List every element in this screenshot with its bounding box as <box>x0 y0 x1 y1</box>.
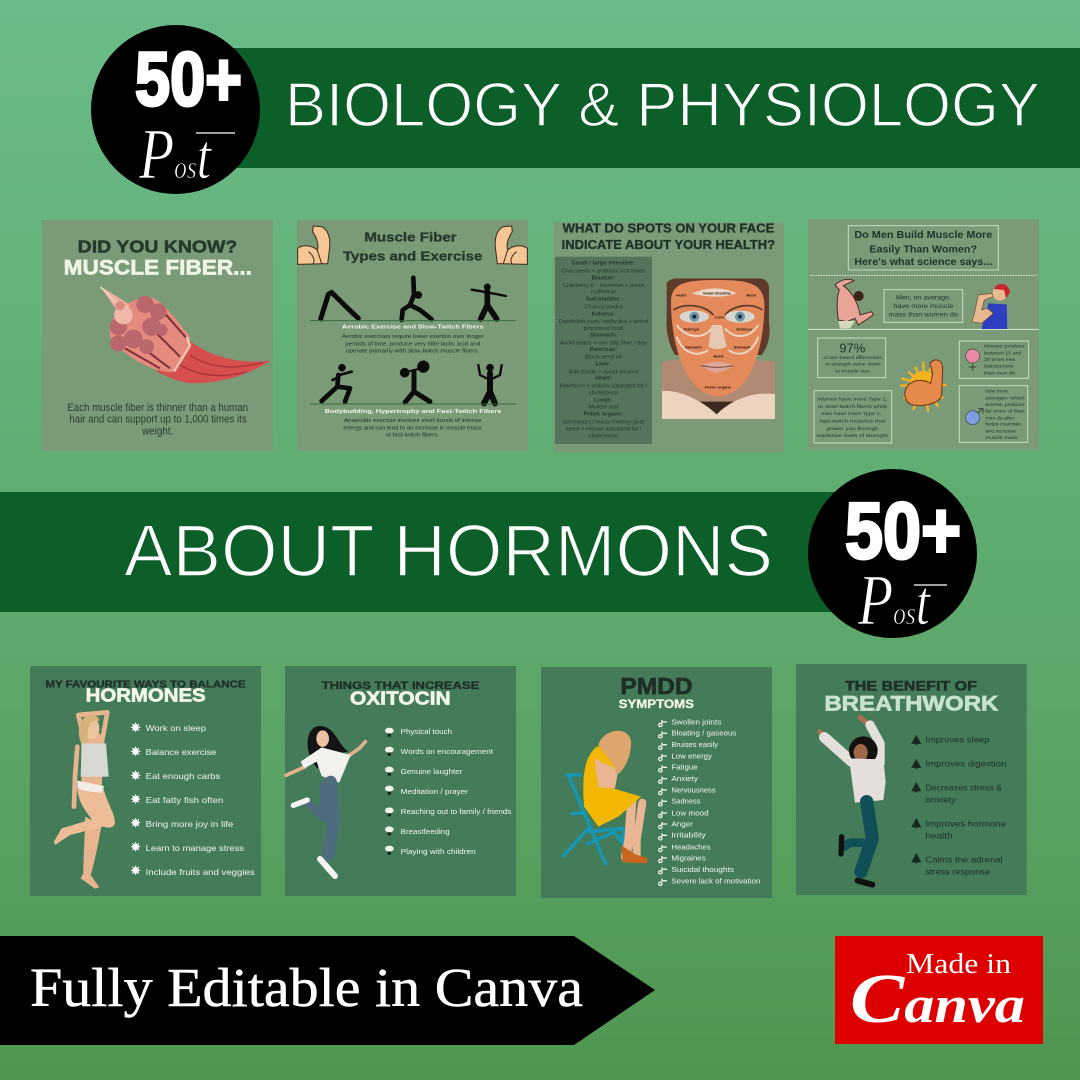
list: symptoms: Nervousness <box>671 787 716 794</box>
list: oxitocin boosters <box>401 727 512 856</box>
callout: testosterone <box>959 341 1029 378</box>
heading: THINGS THAT INCREASE <box>322 680 479 692</box>
list: oxitocin boosters: Meditation / prayer <box>401 787 469 796</box>
body text: Each muscle fiber is thinner than a human <box>67 402 248 414</box>
callout: fiber types: power you through <box>827 426 879 432</box>
remedies list: Stomach: <box>590 333 617 339</box>
heading box <box>848 226 998 270</box>
icons: symptom bullets <box>659 720 667 885</box>
call to action arrow: Fully Editable in Canva <box>30 957 583 1018</box>
banner title: BIOLOGY & PHYSIOLOGY <box>285 71 1040 140</box>
list: symptoms: Low energy <box>671 753 713 760</box>
list: balance tips: Eat fatty fish often <box>146 795 224 805</box>
list: symptoms: Anger <box>671 821 694 828</box>
heading: BREATHWORK <box>824 692 999 716</box>
icons: tree bullets <box>911 735 921 863</box>
remedies list: Pancreas: <box>590 347 617 353</box>
panel: muscle fiber types and exercise <box>297 220 528 451</box>
list: balance tips: Balance exercise <box>146 747 217 757</box>
banner band <box>0 492 840 612</box>
stat: 97 percent: 97% <box>839 341 865 355</box>
list: breathwork benefits <box>925 735 1007 877</box>
callout: fiber types <box>814 391 892 443</box>
anaerobic silhouettes <box>322 361 502 403</box>
badge: 50+ post: Post <box>857 560 932 640</box>
face map illustration: Small intestine <box>703 291 732 296</box>
body text: weight. <box>141 426 173 438</box>
panel: do men build muscle more easily <box>808 219 1039 450</box>
callout: men muscle mass <box>884 290 963 322</box>
heading <box>619 673 694 711</box>
woman figure <box>54 712 115 889</box>
badge: made in canva: Canva <box>850 961 1025 1038</box>
list: symptoms: Bruises easily <box>671 742 719 749</box>
callout: fiber types: fast-twitch muscles that <box>820 419 886 425</box>
list: oxitocin boosters: Words on encouragement <box>401 747 493 756</box>
list: symptoms: Sadness <box>671 799 701 806</box>
list: balance tips: Include fruits and veggies <box>146 867 255 877</box>
heading: SYMPTOMS <box>619 698 694 711</box>
remedies list: processed food <box>584 326 623 332</box>
list: breathwork benefits: stress response <box>925 867 990 877</box>
face map illustration: Stomach <box>685 345 702 350</box>
aerobic text: periods of time, produce very little lactic acid and <box>345 341 480 347</box>
stat: 97 percent: in strength come down <box>825 362 881 367</box>
banner title: ABOUT HORMONS <box>124 511 773 592</box>
callout: fiber types: Women have more Type 1, <box>817 397 887 403</box>
banner band <box>225 48 1080 168</box>
list: breathwork benefits: Calms the adrenal <box>925 855 1003 865</box>
list: oxitocin boosters: Reaching out to family / friends <box>401 807 512 816</box>
badge: 50+ post: Post <box>138 114 213 194</box>
badge: 50+ post: 50+ <box>845 486 961 575</box>
callout: men muscle mass: Men, on average, <box>896 294 951 301</box>
heading <box>562 222 775 252</box>
icons: sun bullets <box>131 723 140 875</box>
list: balance tips: Work on sleep <box>146 723 206 733</box>
face map illustration: Liver <box>715 315 725 320</box>
list: balance tips: Bring more joy in life <box>146 819 234 829</box>
anaerobic text: Bodybuilding, Hypertrophy and Fast-Twitch Fibers <box>325 409 501 415</box>
body text: hair and can support up to 1,000 times its <box>69 414 247 426</box>
callout: fiber types: men have more Type 2, <box>821 411 881 417</box>
heading: Muscle Fiber <box>364 230 457 245</box>
heading: THE BENEFIT OF <box>845 678 978 694</box>
remedies list: Lungs: <box>594 397 613 403</box>
heading: DID YOU KNOW? <box>78 237 237 257</box>
anaerobic text: of fast-twitch fibers. <box>386 433 439 439</box>
list: symptoms: Anxiety <box>671 776 699 783</box>
body text <box>67 402 248 438</box>
icon: flexed arm right <box>495 226 527 264</box>
heading: HORMONES <box>86 685 206 706</box>
list: balance tips <box>146 723 255 877</box>
remedies list: Avoid toxins + min 30g fiber / day <box>560 341 647 347</box>
list: balance tips: Eat enough carbs <box>146 771 221 781</box>
callout: testosterone: 20 times less <box>984 357 1016 362</box>
jumping woman figure <box>286 726 365 876</box>
heading: MUSCLE FIBER... <box>64 256 252 280</box>
callout: estrogen: Now more <box>985 389 1008 394</box>
stat: 97 percent: of sex-based differences <box>823 355 883 360</box>
heading <box>322 680 479 708</box>
panel: benefit of breathwork <box>796 664 1027 895</box>
list: symptoms: Fatigue <box>671 765 698 772</box>
face map illustration <box>662 278 775 419</box>
list: symptoms: Migraines <box>671 855 706 862</box>
list: breathwork benefits: Improves digestion <box>925 759 1007 769</box>
remedies list: Chia seeds + probiotic rich foods <box>561 269 646 275</box>
list: symptoms: Suicidal thoughts <box>671 867 735 874</box>
heading: WHAT DO SPOTS ON YOUR FACE <box>563 222 774 236</box>
badge: made in canva <box>835 936 1043 1044</box>
anaerobic text <box>325 409 501 439</box>
woman on chair figure <box>563 731 647 864</box>
remedies list: Bladder: <box>592 275 615 281</box>
list: breathwork benefits: Improves hormone <box>925 819 1006 829</box>
aerobic text <box>342 325 484 355</box>
callout: estrogen <box>959 386 1028 442</box>
callout: estrogen: muscle mass <box>985 435 1018 440</box>
stat: 97 percent <box>818 338 886 378</box>
heading box: Easily Than Women? <box>869 244 977 255</box>
heading <box>343 230 482 264</box>
face map illustration: Kidneys <box>736 327 753 332</box>
list: oxitocin boosters: Playing with children <box>401 847 476 856</box>
list: breathwork benefits: health <box>925 831 953 841</box>
remedies list: Chanca piedra <box>584 304 622 310</box>
remedies list: Liver: <box>596 362 611 368</box>
callout: testosterone: than men do <box>984 370 1016 375</box>
callout: estrogen: estrogen- which <box>985 395 1025 400</box>
list: breathwork benefits: anxiety <box>925 795 957 805</box>
remedies list: caffeine <box>591 289 616 295</box>
anaerobic text: Anaerobic exercise involves short bursts of intense <box>344 418 481 424</box>
face map illustration: Stomach <box>734 345 751 350</box>
remedies list: Black seed oil <box>585 355 622 361</box>
anaerobic text: energy and can lead to an increase in muscle mass <box>343 425 482 431</box>
icon: bodybuilder <box>835 279 873 328</box>
badge: made in canva: Made in <box>906 948 1012 980</box>
heading: Types and Exercise <box>343 249 482 264</box>
list: symptoms: Swollen joints <box>671 719 722 726</box>
heading: MY FAVOURITE WAYS TO BALANCE <box>45 680 246 691</box>
panel: things that increase oxitocin <box>285 666 516 896</box>
heading: INDICATE ABOUT YOUR HEALTH? <box>562 238 775 252</box>
heading box: Here's what science says... <box>854 257 993 268</box>
heading <box>64 237 252 280</box>
remedies list: Gall bladder: <box>586 297 621 303</box>
remedies list: Mullein leaf <box>588 405 619 411</box>
callout: fiber types: or slow-twitch fibers while <box>818 404 888 410</box>
panel: spots on your face <box>553 222 784 452</box>
list: balance tips: Learn to manage stress <box>146 843 245 853</box>
list: symptoms: Bloating / gaseous <box>671 731 737 738</box>
badge: 50+ post: 50+ <box>135 38 242 122</box>
list: oxitocin boosters: Genuine laughter <box>401 767 463 776</box>
aerobic text: operate primarily with slow-twitch muscle fibers. <box>346 349 479 355</box>
heading box: Do Men Build Muscle More <box>854 230 993 241</box>
face map illustration: Heart <box>746 293 757 298</box>
badge: 50+ post <box>91 25 260 194</box>
callout: estrogen: men do-also <box>985 415 1014 420</box>
remedies list: Heart: <box>595 376 612 382</box>
callout: men muscle mass: have more muscle <box>893 303 954 310</box>
list: symptoms: Low mood <box>671 810 709 817</box>
list: symptoms <box>671 719 760 885</box>
remedies list: Hawthorn + reduce saturated fat / <box>560 384 648 390</box>
callout: testosterone: testosterone <box>984 364 1014 369</box>
banner: biology and physiology <box>91 25 1080 194</box>
call to action arrow <box>0 936 655 1045</box>
list: symptoms: Irritability <box>671 833 706 840</box>
panel: pmdd symptoms <box>541 667 772 898</box>
panel: ways to balance hormones <box>30 666 261 896</box>
callout: estrogen: and increase <box>985 428 1016 433</box>
face map illustration: Pelvic organs <box>705 385 732 390</box>
remedies list <box>555 257 652 444</box>
face map illustration: Heart <box>676 293 687 298</box>
remedies list: Kidneys: <box>592 311 615 317</box>
icon: woman flexing <box>972 284 1010 329</box>
callout: estrogen: far more of than <box>985 409 1025 414</box>
stat: 97 percent: to muscle size <box>835 368 870 373</box>
callout: men muscle mass: mass than women do <box>889 312 958 319</box>
heading <box>45 680 246 706</box>
ground lines <box>310 321 516 404</box>
heading <box>824 678 999 716</box>
face map illustration: Kidneys <box>684 327 700 332</box>
callout: testosterone: between 15 and <box>984 350 1022 355</box>
callout: estrogen: women produce <box>985 402 1025 407</box>
face map illustration: Heart <box>713 354 724 359</box>
remedies list: Milk thistle + avoid alcohol <box>569 369 638 375</box>
list: breathwork benefits: Decreases stress & <box>925 783 1002 793</box>
list: breathwork benefits: Improves sleep <box>925 735 990 745</box>
aerobic text: Aerobic Exercise and Slow-Twitch Fibers <box>342 325 484 331</box>
remedies list: cholesterol <box>589 391 618 397</box>
remedies list: Pelvic organs: <box>584 412 623 418</box>
dancing woman figure <box>820 717 886 885</box>
list: symptoms: Headaches <box>671 844 711 851</box>
banner: about hormons <box>0 469 977 640</box>
callout: estrogen: helps maintain <box>985 422 1022 427</box>
remedies list: cholesterol <box>589 434 618 440</box>
remedies list: Dandelion root / nettle tea + avoid <box>559 319 648 325</box>
remedies list: Cranberry D - mannose + avoid <box>563 283 644 289</box>
aerobic silhouettes <box>321 278 506 320</box>
callout: fiber types: explosive feats of strength <box>817 433 888 439</box>
muscle fiber illustration <box>101 287 271 383</box>
remedies list: Small / large intestine: <box>572 261 635 267</box>
icon: flexed arm left <box>298 226 330 264</box>
list: oxitocin boosters: Physical touch <box>401 727 452 736</box>
icons: mushroom bullets <box>385 728 394 855</box>
remedies list: Schisandra / maca / horney goat <box>563 420 645 426</box>
list: oxitocin boosters: Breastfeeding <box>401 827 450 836</box>
badge: 50+ post <box>808 469 977 640</box>
icon: flexed arm with burst <box>900 360 947 412</box>
panel: did you know muscle fiber <box>42 220 273 451</box>
aerobic text: Aerobic exercises require lower exertion over longer <box>342 334 484 340</box>
heading: PMDD <box>620 673 693 699</box>
heading: OXITOCIN <box>350 687 451 708</box>
list: symptoms: Severe lack of motivation <box>671 878 760 885</box>
remedies list: weed + reduce saturated fat / <box>565 426 642 432</box>
callout: testosterone: Women produce <box>984 344 1025 349</box>
